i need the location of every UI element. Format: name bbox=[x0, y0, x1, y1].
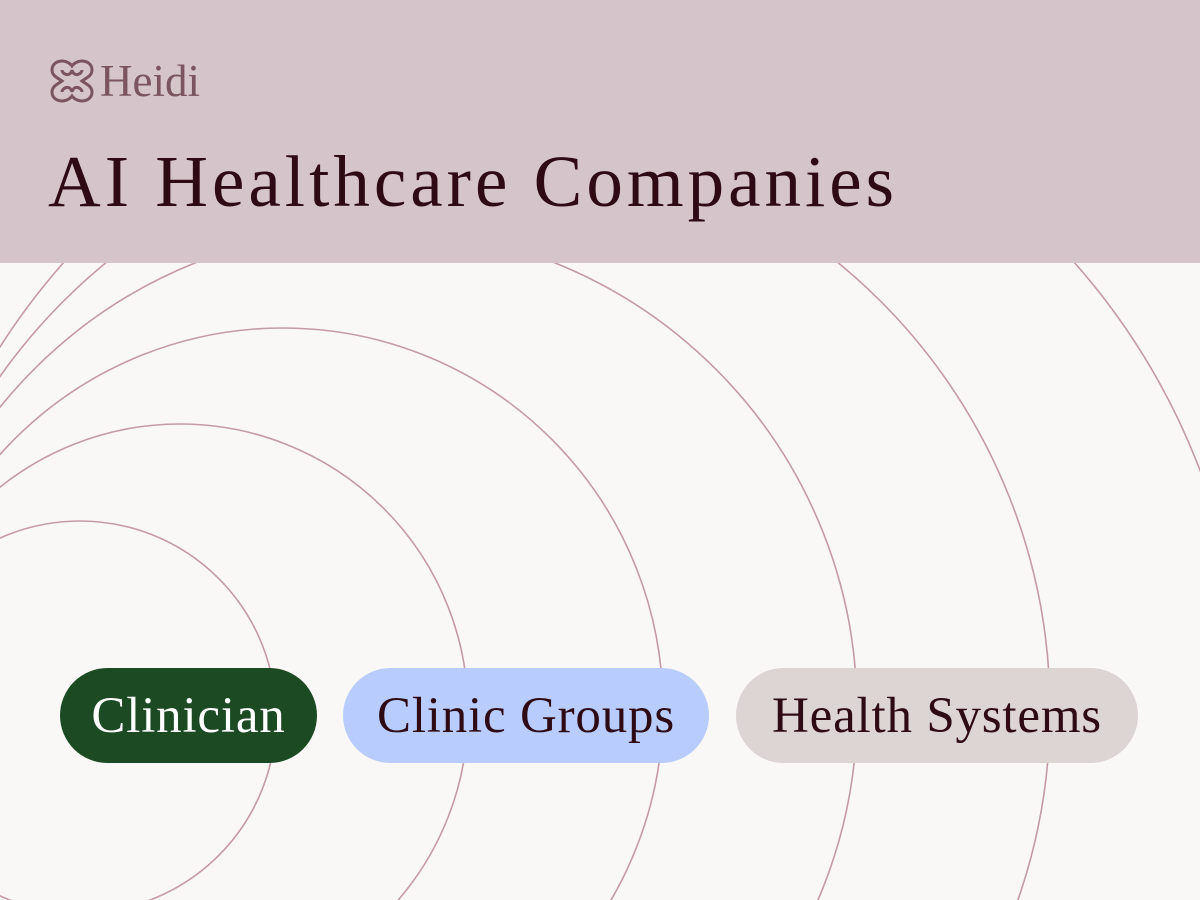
pill: Clinician bbox=[60, 668, 317, 763]
pill: Health Systems: Health Systems bbox=[772, 688, 1102, 744]
icon: logo knot bbox=[50, 60, 94, 102]
title: AI Healthcare Companies bbox=[48, 141, 898, 222]
header band bbox=[0, 0, 1200, 263]
logo: Heidi bbox=[100, 56, 200, 106]
pill: Clinic Groups bbox=[343, 668, 709, 763]
pill: Health Systems bbox=[736, 668, 1138, 763]
logo bbox=[50, 56, 200, 106]
pill: Clinic Groups: Clinic Groups bbox=[377, 688, 675, 744]
pill: Clinician: Clinician bbox=[91, 688, 286, 744]
